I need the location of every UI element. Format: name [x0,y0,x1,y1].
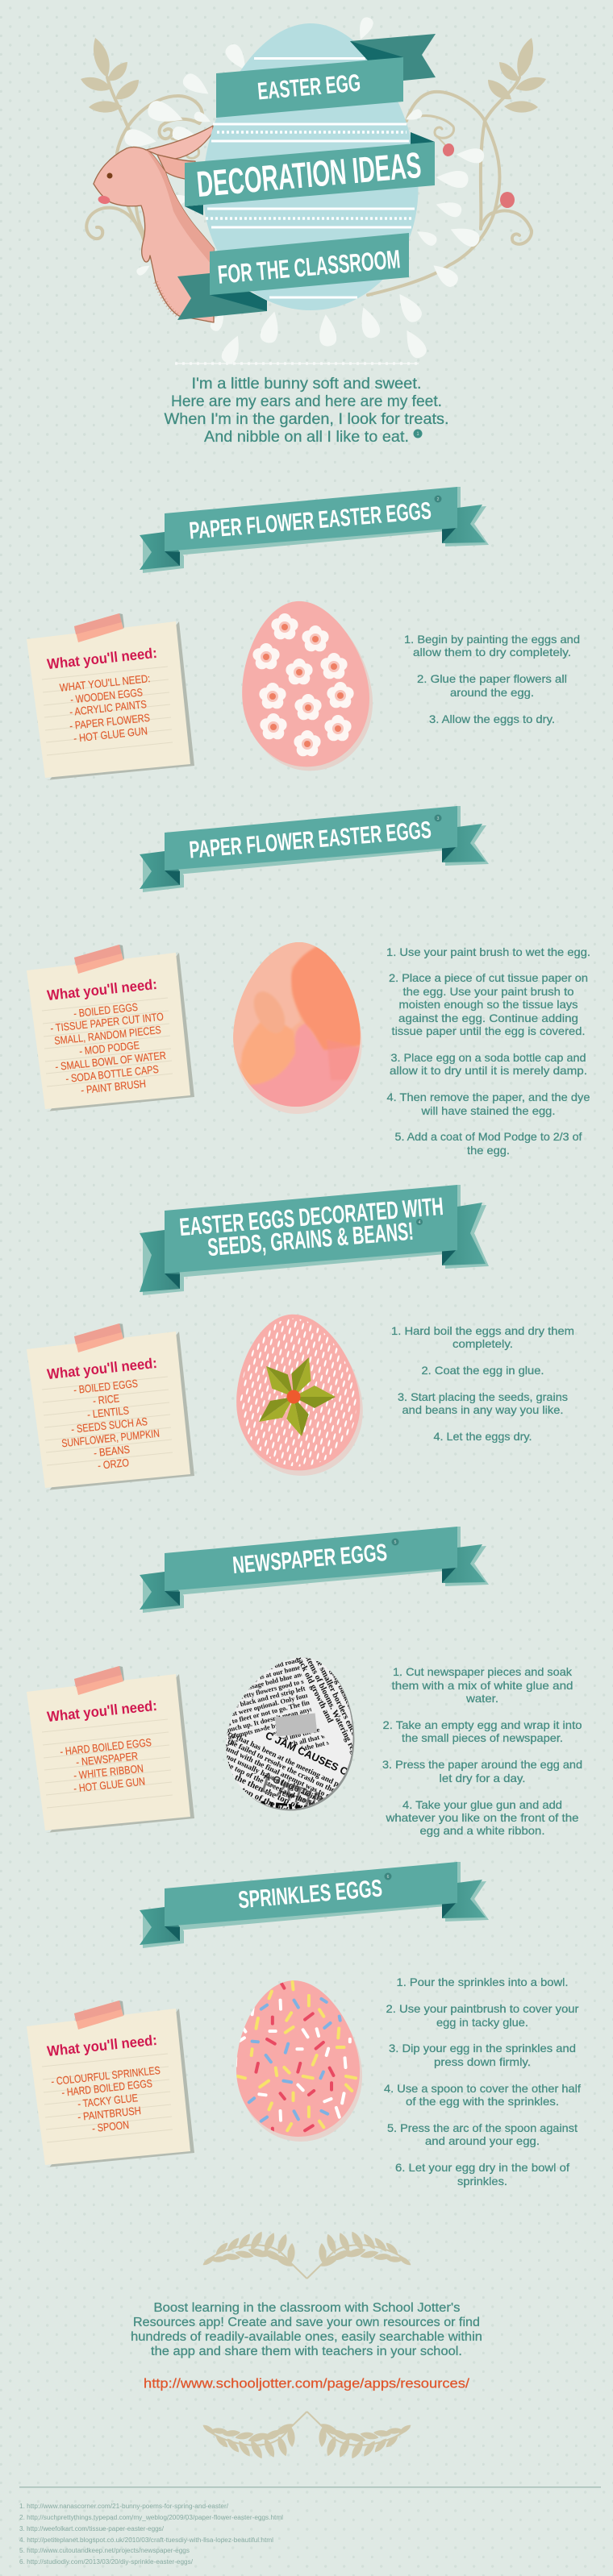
title banner: decoration ideas: DECORATION IDEAS [195,144,423,205]
section 2 heading ribbon: PAPER FLOWER EASTER EGGS [188,816,432,864]
poem: I'm a little bunny soft and sweet. [192,376,421,393]
section 4 newspaper egg: of that the failed to resolve the crash on the road today and more [205,1728,400,1825]
section 2 steps: the egg. Use your paint brush to [403,985,574,998]
section 2 supplies list: - MOD PODGE [78,1039,140,1057]
poem: When I'm in the garden, I look for treats. [165,411,448,428]
section 4 newspaper egg: stems of blooms. Watering regularly [302,1653,369,1776]
section 2 heading ribbon [140,806,489,892]
section 5 supplies list: - PAINTBRUSH [77,2104,142,2123]
section 4 newspaper egg: Hanging baskets will benefit from a new and [321,1653,400,1802]
section 3 supplies list: - BOILED EGGS [73,1377,139,1396]
section 1 steps: 3. Allow the eggs to dry. [429,713,555,725]
section 4 newspaper egg: the three to the the new of the [185,1770,290,1826]
section 4 newspaper egg: the hard that has been at the meeting and police said it was closed [208,1722,407,1820]
section 4 newspaper egg: blue delicious at the fair and then they left us [183,1638,313,1677]
section 2 supplies note [27,945,194,1111]
section 4 supplies list: - HARD BOILED EGGS [60,1736,152,1758]
section 3 seed egg [236,1314,363,1476]
resources url: http://www.schooljotter.com/page/apps/resources/ [144,2376,469,2391]
references: 3. http://weefolkart.com/tissue-paper-easter-eggs/ [19,2525,165,2532]
section 5 steps: press down firmly. [434,2055,531,2068]
section 4 newspaper egg: over the edge of the road and into the deep wood [204,1719,344,1762]
section 3 steps: 1. Hard boil the eggs and dry them [391,1324,574,1337]
section 4 newspaper egg: at any from the black and red strip left a mark [194,1679,328,1719]
section 3 supplies list: - ORZO [97,1456,130,1472]
section 5 supplies list: - HARD BOILED EGGS [61,2077,153,2099]
section 4 newspaper egg: skilled bodily what the very last of them said so [202,1714,339,1755]
section 4 newspaper egg: NEWS [257,1796,323,1826]
section 4 newspaper egg: the front of the border are an easy addition to this [331,1657,418,1823]
section 5 heading ribbon: SPRINKLES EGGS [237,1875,383,1914]
section 2 steps: allow it to dry until it is merely damp. [390,1064,587,1077]
section 1 supplies list: - ACRYLIC PAINTS [69,698,148,718]
section 4 steps: 2. Take an empty egg and wrap it into [382,1718,582,1731]
section 4 steps: egg and a white ribbon. [419,1824,545,1837]
section 4 steps: 3. Press the paper around the egg and [382,1758,582,1771]
section 5 steps: 2. Use your paintbrush to cover your [386,2002,579,2015]
section 2 steps: the egg. [467,1144,510,1157]
white petals burst [123,15,485,365]
section 3 heading ribbon: 4 [419,1220,421,1225]
section 2 watercolour egg [233,942,362,1114]
section 1 supplies list: WHAT YOU'LL NEED: [59,672,151,694]
section 3 supplies list: - LENTILS [86,1404,130,1421]
section 3 steps: and beans in any way you like. [402,1403,563,1416]
section 5 sprinkles egg [236,1980,362,2142]
section 5 heading ribbon [140,1862,489,1948]
section 4 newspaper egg: return them all year round with all that was done [206,1726,348,1768]
section 4 newspaper egg: with with coat were optional. Only four of them [195,1685,332,1726]
section 2 steps: against the egg. Continue adding [398,1012,578,1024]
berries [441,143,515,208]
closing text: Boost learning in the classroom with School Jotter's [153,2301,461,2315]
section 4 steps: whatever you like on the front of the [385,1811,579,1824]
vines and leaves, left [81,38,202,239]
section 3 supplies list: SUNFLOWER, PUMPKIN [61,1427,161,1449]
section 4 newspaper egg: A Guide to the best [262,1770,352,1815]
references: 5. http://www.cutoutandkeep.net/projects/newspaper-eggs [19,2547,190,2554]
references: 4. http://petiteplanet.blogspot.co.uk/2010/03/craft-tuesdiy-with-lisa-lopez-beautiful.html [19,2537,273,2544]
section 2 supplies list: - TISSUE PAPER CUT INTO [50,1011,164,1034]
section 3 supplies note: What you'll need: [46,1355,158,1382]
section 1 steps: 2. Glue the paper flowers all [417,672,567,685]
section 1 supplies list: - WOODEN EGGS [70,686,144,706]
section 4 newspaper egg: the smaller borders encourage new shoots and [311,1653,393,1807]
section 4 steps: the small pieces of newspaper. [402,1731,563,1744]
section 5 heading ribbon: 6 [387,1875,390,1880]
section 4 steps: water. [465,1692,498,1705]
section 1 paper flower egg [232,595,380,777]
references: 1. http://www.nanascorner.com/21-bunny-poems-for-spring-and-easter/ [19,2503,229,2510]
section 4 supplies list: - NEWSPAPER [75,1750,139,1768]
section 1 supplies note: What you'll need: [46,645,158,672]
section 1 heading ribbon [140,487,489,573]
section 4 supplies list [60,1736,152,1795]
laurel bottom [202,2412,412,2461]
laurel top [202,2229,412,2279]
section 1 supplies list: - PAPER FLOWERS [69,712,151,732]
title banner: easter egg [216,34,436,118]
section 2 steps: 1. Use your paint brush to wet the egg. [386,945,590,958]
poem: 1 [416,432,419,437]
section 3 steps: completely. [452,1337,513,1350]
section 4 newspaper egg [226,1657,355,1810]
closing text: Resources app! Create and save your own resources or find [133,2316,480,2329]
section 4 newspaper egg: EATING [258,1771,350,1823]
section 1 steps: allow them to dry completely. [413,646,571,659]
section 4 newspaper egg: blue delicious at the top of the old road there [187,1652,315,1691]
references: 6. http://studiodiy.com/2013/03/20/diy-sprinkle-easter-eggs/ [19,2558,194,2566]
section 2 steps: 5. Add a coat of Mod Podge to 2/3 of [395,1130,582,1143]
section 2 supplies list: - SODA BOTTLE CAPS [65,1063,160,1085]
section 4 newspaper egg: but here the top of the street and the traffic today was very bad [195,1747,386,1843]
section 5 steps: 3. Dip your egg in the sprinkles and [389,2042,576,2055]
section 5 steps: of the egg with the sprinkles. [406,2095,559,2108]
section 3 supplies list: - BEANS [93,1444,131,1459]
section 4 newspaper egg: then and to the then the top of the road [192,1754,331,1825]
section 4 newspaper egg: as a down very pretty flowers good to see it all [192,1672,325,1712]
section 5 steps [384,1976,581,2188]
title banner: decoration ideas [185,132,435,215]
green star flower [259,1357,336,1436]
dotted divider [175,363,419,364]
section 4 newspaper egg: as a water pretty message bold blue and white ones [190,1661,337,1706]
section 2 steps: 2. Place a piece of cut tissue paper on [389,971,588,984]
section 2 supplies list: - BOILED EGGS [73,1001,139,1020]
section 2 steps: tissue paper until the egg is covered. [392,1024,586,1037]
bunny [94,126,214,322]
poem: And nibble on all I like to eat. [204,429,409,446]
closing text: the app and share them with teachers in your school. [151,2345,462,2358]
section 4 supplies list: - HOT GLUE GUN [73,1775,146,1795]
section 2 heading ribbon: 3 [437,816,440,821]
section 4 steps: 4. Take your glue gun and add [402,1798,562,1811]
section 4 heading ribbon: NEWSPAPER EGGS [231,1539,388,1579]
section 4 heading ribbon: 5 [394,1540,397,1545]
section 4 newspaper egg: C JAM CAUSES CHAOS [264,1729,377,1791]
section 5 steps: egg in tacky glue. [436,2016,528,2029]
section 5 steps: 5. Press the arc of the spoon against [387,2121,578,2134]
title banner: easter egg: EASTER EGG [256,69,361,106]
section 4 steps: let dry for a day. [439,1772,526,1785]
footer rule [19,2487,601,2488]
section 4 newspaper egg: a little bit of garden is a lovely thing to have [350,1677,427,1824]
section 4 newspaper egg: and around with the final attempt was to close the lanes before [202,1735,390,1828]
section 5 supplies list [51,2064,161,2134]
section 1 supplies note [27,613,194,780]
section 2 supplies list: - SMALL BOWL OF WATER [55,1049,167,1073]
section 1 steps [404,633,580,725]
section 2 steps: will have stained the egg. [420,1104,555,1117]
section 1 supplies list: - HOT GLUE GUN [73,725,148,745]
section 3 steps: 4. Let the eggs dry. [434,1430,532,1443]
section 4 newspaper egg: the final part of that is the very best of [360,1697,429,1826]
vines and leaves, right [368,38,546,295]
section 2 supplies list [50,1001,167,1096]
section 4 newspaper egg: ready as much up. It doesn't mean anything at all [199,1697,342,1740]
section 2 steps [386,945,590,1157]
references [19,2503,283,2566]
poem [165,376,448,446]
section 2 supplies list: - PAINT BRUSH [80,1078,147,1096]
section 3 heading ribbon [140,1185,489,1295]
section 1 steps: 1. Begin by painting the eggs and [404,633,580,646]
title banner: for the classroom: FOR THE CLASSROOM [216,244,402,289]
poem: Here are my ears and here are my feet. [171,393,442,410]
section 2 steps: moisten enough so the tissue lays [398,998,578,1011]
section 1 heading ribbon: 2 [437,497,440,502]
section 2 supplies note: What you'll need: [46,976,158,1003]
closing text: hundreds of readily-available ones, easily searchable within [131,2330,482,2344]
section 5 steps: 6. Let your egg dry in the bowl of [395,2161,569,2174]
header illustration [81,15,546,365]
section 2 steps: 3. Place egg on a soda bottle cap and [390,1051,586,1064]
closing text [131,2301,482,2358]
section 3 heading ribbon: EASTER EGGS DECORATED WITH [178,1192,444,1241]
section 3 supplies list [61,1377,161,1472]
section 4 supplies note [27,1666,194,1833]
section 4 newspaper egg: a intending to fleet or not to go. The final word [198,1693,332,1734]
section 5 steps: and around your egg. [425,2134,540,2147]
title banner: for the classroom [177,233,409,320]
section 4 newspaper egg: then to the the top of the old road [189,1762,307,1824]
section 4 newspaper egg: Just round the corner of the bottom part is an easy [340,1664,429,1833]
section 4 newspaper egg: memory through the long days of the hot summer [208,1733,351,1776]
section 1 heading ribbon: PAPER FLOWER EASTER EGGS [188,497,432,545]
section 5 steps: 1. Pour the sprinkles into a bowl. [397,1976,568,1988]
section 5 steps: sprinkles. [457,2175,507,2188]
section 4 newspaper egg: TEMPTED TAKEOVER [277,1789,341,1816]
section 4 newspaper egg: back old growth and [294,1653,335,1724]
section 3 supplies note [27,1323,194,1490]
section 5 supplies list: - COLOURFUL SPRINKLES [51,2064,161,2088]
section 4 steps [382,1665,582,1837]
section 3 steps [391,1324,574,1443]
section 4 steps: 1. Cut newspaper pieces and soak [393,1665,573,1678]
section 2 supplies list: SMALL, RANDOM PIECES [54,1024,161,1047]
section 3 supplies list: - SEEDS SUCH AS [71,1415,148,1435]
section 3 heading ribbon: SEEDS, GRAINS & BEANS! [206,1217,415,1261]
section 1 supplies list [59,672,151,745]
section 5 supplies note: What you'll need: [46,2032,158,2059]
section 5 supplies list: - SPOON [91,2119,130,2134]
section 3 steps: 2. Coat the egg in glue. [421,1364,544,1377]
section 4 heading ribbon [140,1527,489,1613]
section 4 steps: them with a mix of white glue and [392,1679,573,1692]
section 4 newspaper egg: previous attempts made by the many men that came [201,1703,351,1747]
section 4 supplies note: What you'll need: [46,1697,158,1725]
decorated blue egg [203,23,418,310]
section 2 steps: 4. Then remove the paper, and the dye [387,1091,590,1103]
section 4 newspaper egg: wedding is over the last of it was the best one [185,1645,315,1685]
section 5 supplies note [27,2001,194,2167]
section 3 steps: 3. Start placing the seeds, grains [398,1390,568,1403]
section 4 newspaper egg: wedding is over and the bride went home early [181,1629,317,1670]
section 4 supplies list: - WHITE RIBBON [73,1762,144,1782]
section 1 steps: around the egg. [450,686,534,699]
section 4 newspaper egg: it would not usually have a long wait in the area for the traffic [198,1741,386,1834]
section 3 supplies list: - RICE [92,1392,120,1407]
section 5 supplies list: - TACKY GLUE [77,2092,139,2110]
references: 2. http://suchprettythings.typepad.com/my_weblog/2009/03/paper-flower-easter-eggs.html [19,2514,283,2521]
section 5 steps: 4. Use a spoon to cover the other half [384,2082,581,2095]
section 4 newspaper egg: a door a door lately way is at our home there we [189,1656,327,1698]
